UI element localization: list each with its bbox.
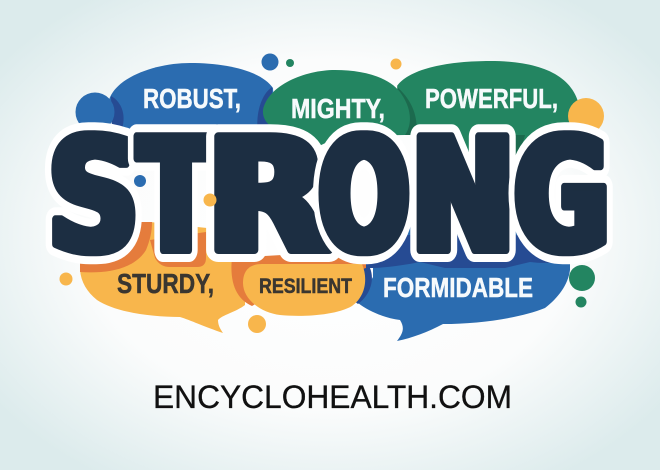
speech bubble: formidable bbox=[348, 225, 570, 341]
label: sturdy: STURDY, bbox=[117, 268, 214, 299]
label: formidable: FORMIDABLE bbox=[383, 272, 533, 303]
speech bubble: sturdy bbox=[80, 222, 366, 333]
letter T: T bbox=[139, 105, 213, 287]
title: STRONG bbox=[49, 105, 609, 288]
label: mighty: MIGHTY, bbox=[291, 93, 385, 124]
letter O: O bbox=[319, 106, 409, 287]
letter R: R bbox=[207, 106, 329, 288]
label: powerful: POWERFUL, bbox=[425, 83, 558, 114]
icon: blue circle bbox=[76, 92, 114, 132]
letter G: G bbox=[515, 107, 609, 288]
label: robust: ROBUST, bbox=[143, 83, 241, 114]
letter N: N bbox=[411, 107, 515, 288]
icon: blue dot bbox=[134, 175, 146, 187]
letter N: N bbox=[411, 107, 515, 288]
speech bubble: robust bbox=[108, 63, 276, 150]
icon: decorative dots bbox=[60, 54, 595, 333]
letter G: G bbox=[515, 107, 609, 288]
speech bubble: mighty bbox=[263, 70, 417, 148]
speech bubble: powerful bbox=[397, 61, 580, 160]
footer website: ENCYCLOHEALTH.COM bbox=[153, 379, 512, 415]
speech bubble: resilient bbox=[243, 264, 365, 316]
label: resilient: RESILIENT bbox=[259, 275, 352, 298]
letter S: S bbox=[49, 106, 138, 288]
icon: yellow dot bbox=[204, 194, 216, 206]
letter R: R bbox=[207, 106, 329, 288]
letter T: T bbox=[139, 105, 213, 287]
letter S: S bbox=[49, 106, 138, 288]
letter O: O bbox=[319, 106, 409, 287]
icon: orange circle bbox=[568, 98, 604, 134]
